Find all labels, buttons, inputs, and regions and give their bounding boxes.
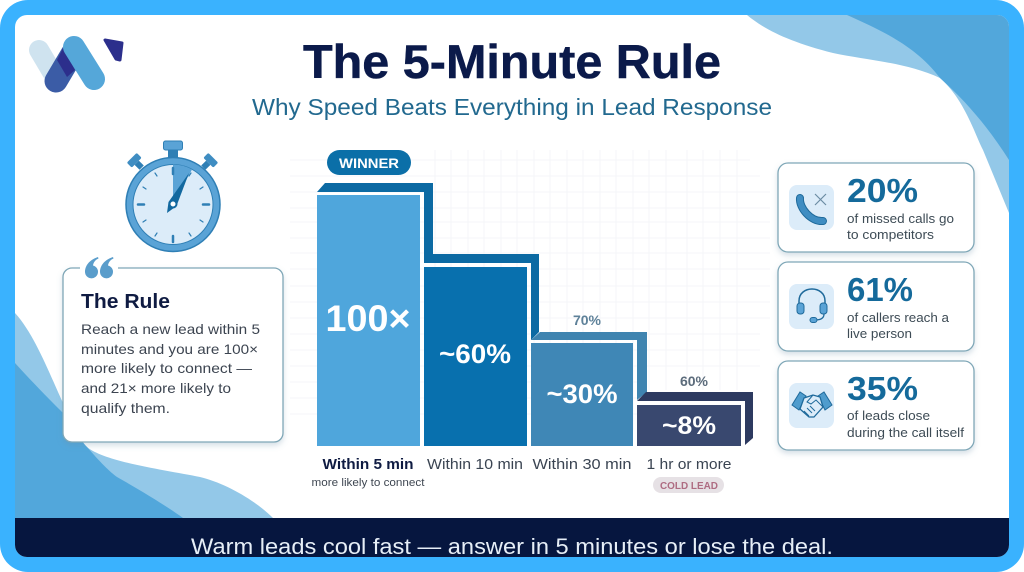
stat card: live person: 61%: [847, 271, 913, 308]
stat card: missed calls: [778, 163, 974, 252]
axis labels: 1 hr or more: [646, 456, 732, 473]
rule body: minutes and you are 100×: [81, 341, 258, 357]
stat card: close during call: during the call itself: [847, 425, 964, 440]
chart grid background: [290, 150, 770, 440]
bar chart: [317, 183, 753, 446]
rule heading: The Rule: [81, 291, 170, 313]
bar: within 5 min: 100×: [326, 298, 410, 339]
bar: within 30 min: ~30%: [546, 379, 618, 409]
stat card: live person: of callers reach a: [847, 310, 950, 325]
bar: within 10 min: [424, 254, 539, 446]
rule body: Reach a new lead within 5: [81, 321, 260, 337]
axis labels: more likely to connect: [312, 477, 424, 489]
stat card: close during call: of leads close: [847, 408, 930, 423]
axis labels: Within 10 min: [427, 456, 523, 473]
stat card: live person: live person: [847, 326, 912, 341]
bar: within 10 min: ~60%: [439, 339, 511, 369]
bottom banner: [15, 518, 1009, 559]
stat card: missed calls: of missed calls go: [847, 211, 954, 226]
icon: phone with x: [789, 185, 834, 230]
icon: quote mark: [85, 257, 114, 278]
axis labels: Within 5 min: [322, 456, 414, 473]
stat card: missed calls: 20%: [847, 172, 918, 209]
stat card: live person: [778, 262, 974, 351]
bar: 1 hr or more: ~8%: [662, 412, 716, 440]
icon: headset: [789, 284, 834, 329]
title: The 5-Minute Rule: [303, 35, 721, 88]
label: 60%: 60%: [680, 373, 709, 389]
icon: handshake: [789, 383, 834, 428]
rule body: and 21× more likely to: [81, 380, 231, 396]
cold lead badge: COLD LEAD: [660, 481, 718, 492]
logo: [39, 40, 122, 81]
bar: within 30 min: [531, 312, 647, 446]
cold lead badge: [653, 477, 724, 493]
rule body: [81, 321, 260, 416]
stat card: close during call: 35%: [847, 370, 918, 407]
bottom banner: Warm leads cool fast — answer in 5 minutes or lose the deal.: [191, 534, 833, 559]
icon: stopwatch: [126, 141, 220, 252]
axis labels: [312, 456, 732, 489]
rule body: qualify them.: [81, 400, 170, 416]
winner badge: WINNER: [339, 155, 399, 171]
bar: within 5 min: [317, 183, 433, 446]
axis labels: Within 30 min: [532, 456, 632, 473]
stat card: missed calls: to competitors: [847, 227, 935, 242]
subtitle: Why Speed Beats Everything in Lead Response: [252, 94, 772, 120]
rule body: more likely to connect —: [81, 360, 252, 376]
panel: the rule: [63, 257, 283, 442]
bar: 1 hr or more: [637, 373, 753, 446]
stat card: close during call: [778, 361, 974, 450]
winner badge: [327, 150, 411, 175]
label: 70%: 70%: [573, 312, 602, 328]
